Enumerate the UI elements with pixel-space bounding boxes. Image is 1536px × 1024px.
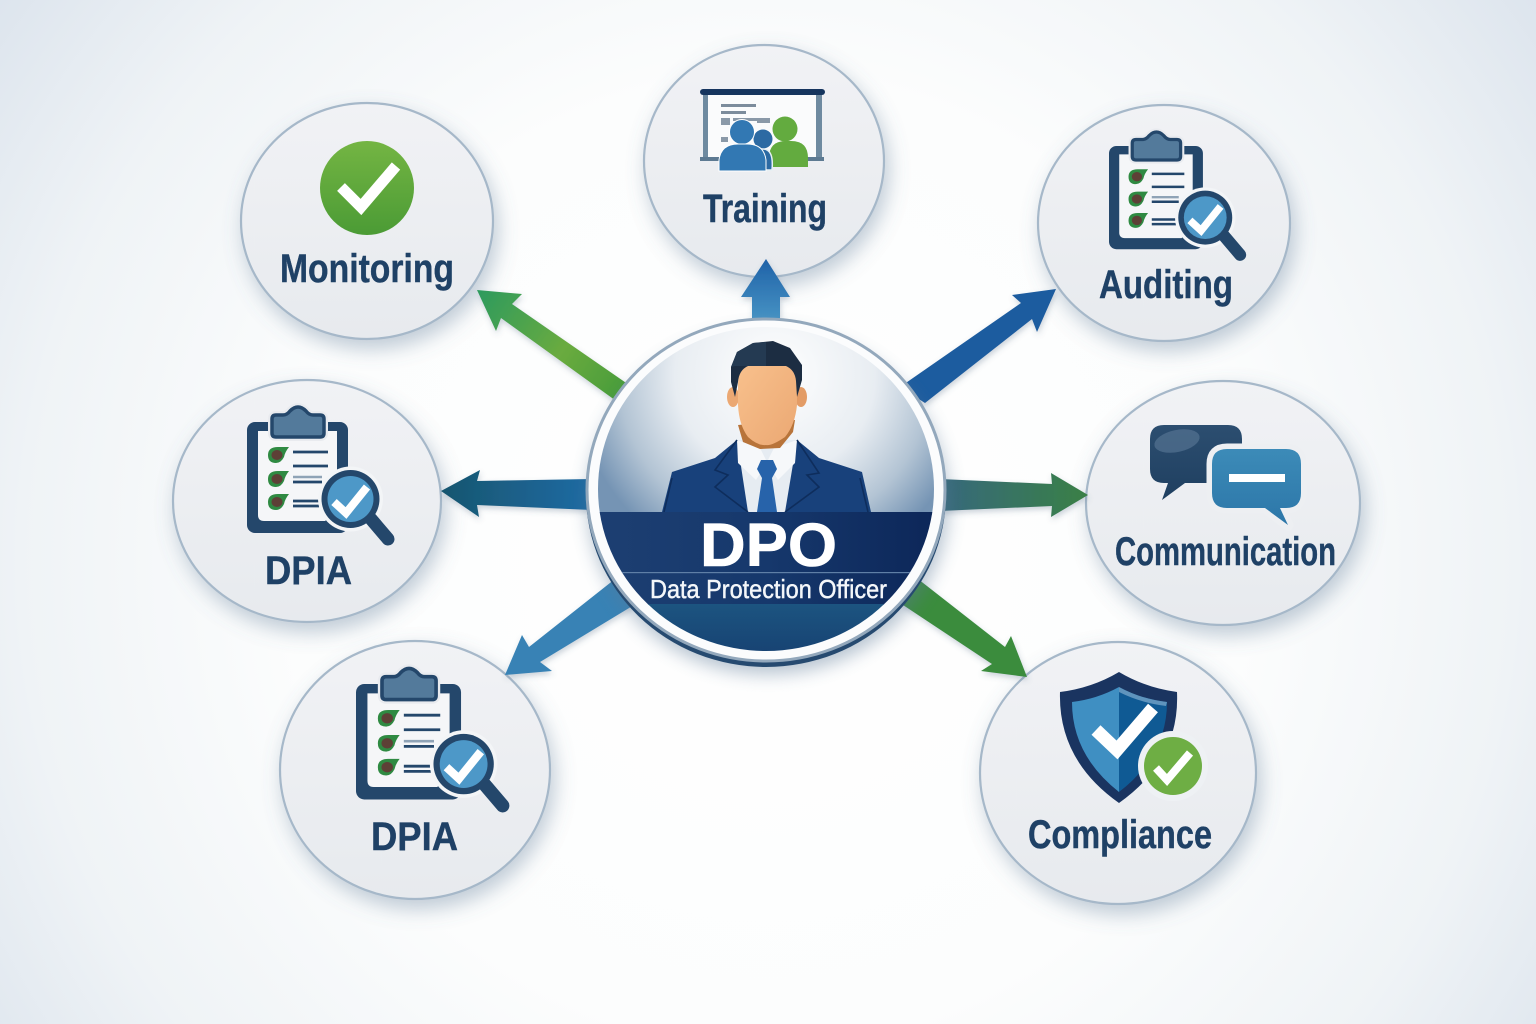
panel: DPIA left	[173, 380, 441, 622]
label: Compliance: Compliance	[1028, 813, 1212, 857]
panel: Monitoring	[241, 103, 493, 339]
label: Monitoring: Monitoring	[280, 247, 454, 291]
panel: Training	[644, 45, 884, 277]
label: Communication: Communication	[1115, 530, 1336, 574]
arrow: to Compliance	[900, 579, 1027, 677]
icon: clipboard with magnifier	[1109, 132, 1240, 255]
arrow: to Monitoring	[477, 290, 632, 403]
arrow: to DPIA left	[441, 470, 592, 517]
label: DPIA: DPIA	[371, 815, 458, 859]
label: Training: Training	[703, 187, 827, 231]
arrow: to Training	[741, 259, 790, 325]
label: DPIA: DPIA	[265, 549, 352, 593]
panel: DPIA bottom	[280, 641, 550, 899]
icon: clipboard with magnifier	[356, 668, 503, 806]
icon: clipboard with magnifier	[247, 407, 388, 539]
icon: shield with check	[1060, 672, 1208, 803]
arrow: to DPIA bottom	[505, 579, 634, 675]
icon: speech bubbles	[1150, 425, 1301, 525]
subheading: Data Protection Officer: Data Protection Officer	[650, 574, 887, 604]
icon: green check	[320, 141, 414, 235]
icon: presentation	[700, 89, 825, 171]
panel: Communication	[1086, 381, 1360, 625]
label: Auditing: Auditing	[1099, 263, 1233, 307]
figure: officer portrait	[662, 341, 871, 512]
heading: DPO: DPO	[700, 511, 837, 579]
arrow: to Auditing	[900, 289, 1056, 403]
panel: Compliance	[980, 642, 1256, 904]
arrow: to Communication	[940, 473, 1088, 517]
panel: DPO centre	[586, 319, 948, 674]
panel: Auditing	[1038, 105, 1290, 341]
